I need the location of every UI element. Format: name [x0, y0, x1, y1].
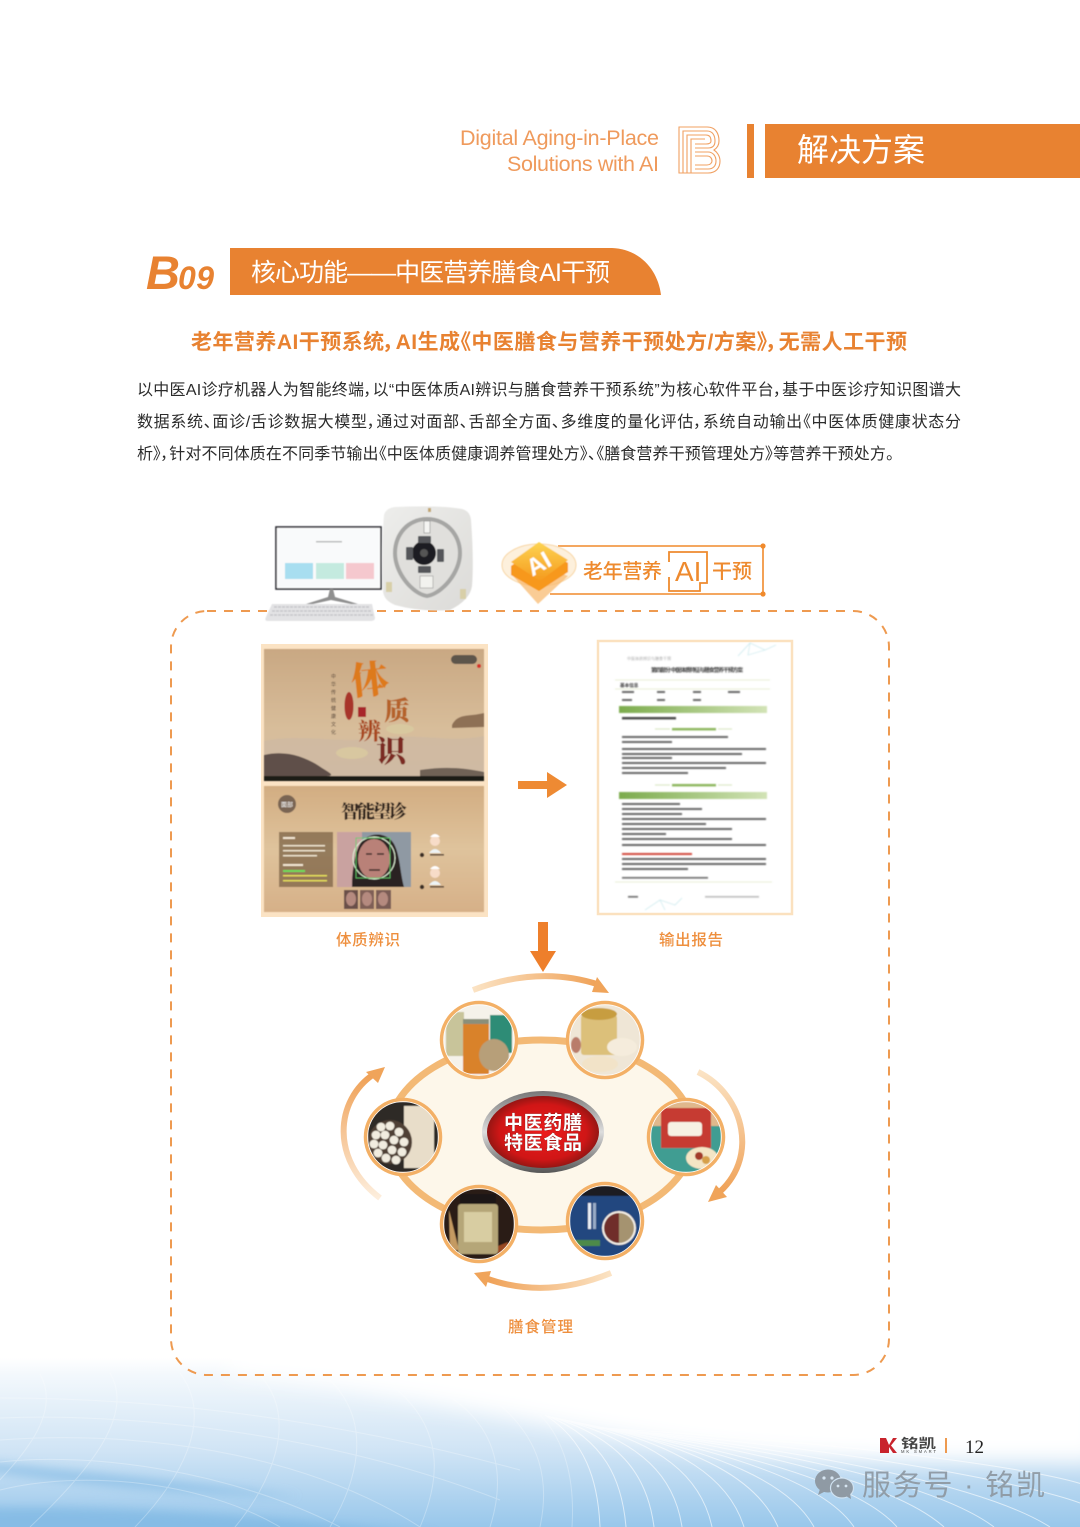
header band: 解决方案: 解决方案: [797, 132, 925, 168]
product photo: bottom-left: [442, 1186, 516, 1262]
screen: 体质辨识 title: 统: [331, 697, 336, 704]
screen: 体质辨识 title: 康: [331, 713, 336, 720]
footer logo: MK SMART: MK SMART: [901, 1449, 936, 1454]
dashed frame: [171, 611, 889, 1375]
footer divider: [945, 1438, 947, 1453]
section title tab: [230, 248, 661, 295]
label: 膳食管理: 膳食管理: [508, 1317, 573, 1336]
icon: golden AI cube: AI: [522, 547, 556, 582]
report document: [598, 641, 792, 914]
page number: 12: [965, 1437, 984, 1458]
icon: golden AI cube: [502, 542, 576, 604]
subtitle: 老年营养AI干预系统，AI生成《中医膳食与营养干预处方/方案》，无需人工干预: [191, 330, 907, 354]
cycle arrow: top: [473, 976, 609, 993]
watermark text: 服务号 · 铭凯: [862, 1469, 1045, 1502]
header tagline: Solutions with AI: [507, 152, 659, 176]
screen: 体质辨识 title: 传: [331, 689, 336, 696]
body paragraph: 数据系统、面诊/舌诊数据大模型，通过对面部、舌部全方面、多维度的量化评估，系统自动输出《中医体质健康状态分: [137, 413, 961, 431]
body paragraph: 以中医AI诊疗机器人为智能终端，以“中医体质AI辨识与膳食营养干预系统”为核心软件平台，基于中医诊疗知识图谱大: [137, 381, 961, 399]
label: 体质辨识: 体质辨识: [336, 931, 400, 949]
center: red badge: 特医食品: [504, 1131, 582, 1154]
diet management cycle diagram: [344, 976, 742, 1288]
screen: 体质辨识 title: 中: [331, 673, 336, 680]
screen: 体质辨识 title: 文: [331, 721, 336, 728]
device: monitor and keyboard: [265, 527, 381, 621]
screen: 体质辨识 title: 质: [384, 691, 410, 728]
badge: 老年营养AI干预: [502, 542, 766, 604]
footer logo: MK SMART: [880, 1436, 936, 1454]
watermark: WeChat icon: [815, 1470, 854, 1499]
header tagline: Digital Aging-in-Place: [460, 126, 659, 150]
screen: 体质辨识 title: [264, 647, 484, 781]
badge: 老年营养AI干预: 干预: [712, 561, 752, 583]
device: AI diagnostic machine: [382, 506, 473, 610]
screen: 体质辨识 title: 识: [376, 727, 410, 771]
screen: 体质辨识 title: 健: [331, 705, 336, 712]
screen: 体质辨识 title: 化: [331, 729, 336, 736]
label: 输出报告: 输出报告: [659, 931, 723, 949]
oval ring: [388, 1040, 694, 1230]
screen: 智能望诊: 智能望诊: [341, 798, 407, 824]
screen: 智能望诊: 面部: [281, 801, 293, 809]
screen: 体质辨识 title: 辨: [358, 713, 381, 746]
footer logo: MK SMART: 铭凯: [901, 1436, 936, 1451]
cycle arrow: bottom: [474, 1271, 611, 1288]
report document: 基本信息: [620, 682, 639, 689]
badge: 老年营养AI干预: 老年营养: [583, 560, 662, 583]
product photo: top-left: [442, 1002, 516, 1078]
center: red badge: [482, 1091, 604, 1173]
header accent bar: [747, 124, 754, 178]
body paragraph: 析》，针对不同体质在不同季节输出《中医体质健康调养管理处方》、《膳食营养干预管理处方》等营养干预处方。: [137, 445, 894, 463]
badge: 老年营养AI干预: AI: [675, 556, 701, 587]
thumbnails: [344, 890, 391, 909]
cycle arrow: right: [698, 1072, 742, 1202]
report document: 第四部分 中医体质特征与膳食营养干预方案: [651, 666, 743, 674]
screenshot panel: constitution identification: [261, 644, 488, 917]
screen: 体质辨识 title: 体: [348, 647, 391, 706]
section number B09: [146, 246, 214, 299]
body paragraph: [137, 381, 961, 463]
center: red badge: 中医药膳: [504, 1111, 582, 1134]
section number B09: 09: [178, 260, 214, 296]
section number B09: B: [146, 246, 180, 299]
product photo: right: [648, 1100, 724, 1174]
camera face view: [337, 832, 411, 887]
product photo: bottom-right: [568, 1184, 642, 1258]
product photo: left: [366, 1100, 440, 1174]
header tagline: [460, 126, 659, 176]
background: blue wave footer: [0, 1370, 1080, 1527]
cycle arrow: left: [344, 1067, 385, 1198]
section title tab: 核心功能——中医营养膳食AI干预: [251, 259, 610, 287]
icon: B logo: [679, 127, 720, 173]
product photo: top-right: [568, 1002, 642, 1078]
arrow: right: [518, 772, 567, 798]
header band: 解决方案: [765, 124, 1080, 178]
report document: 中医体质辨识与膳食干预: [627, 655, 671, 661]
screen: 体质辨识 title: 华: [331, 681, 336, 688]
screen: 智能望诊: [264, 786, 484, 912]
arrow: down: [530, 922, 556, 972]
